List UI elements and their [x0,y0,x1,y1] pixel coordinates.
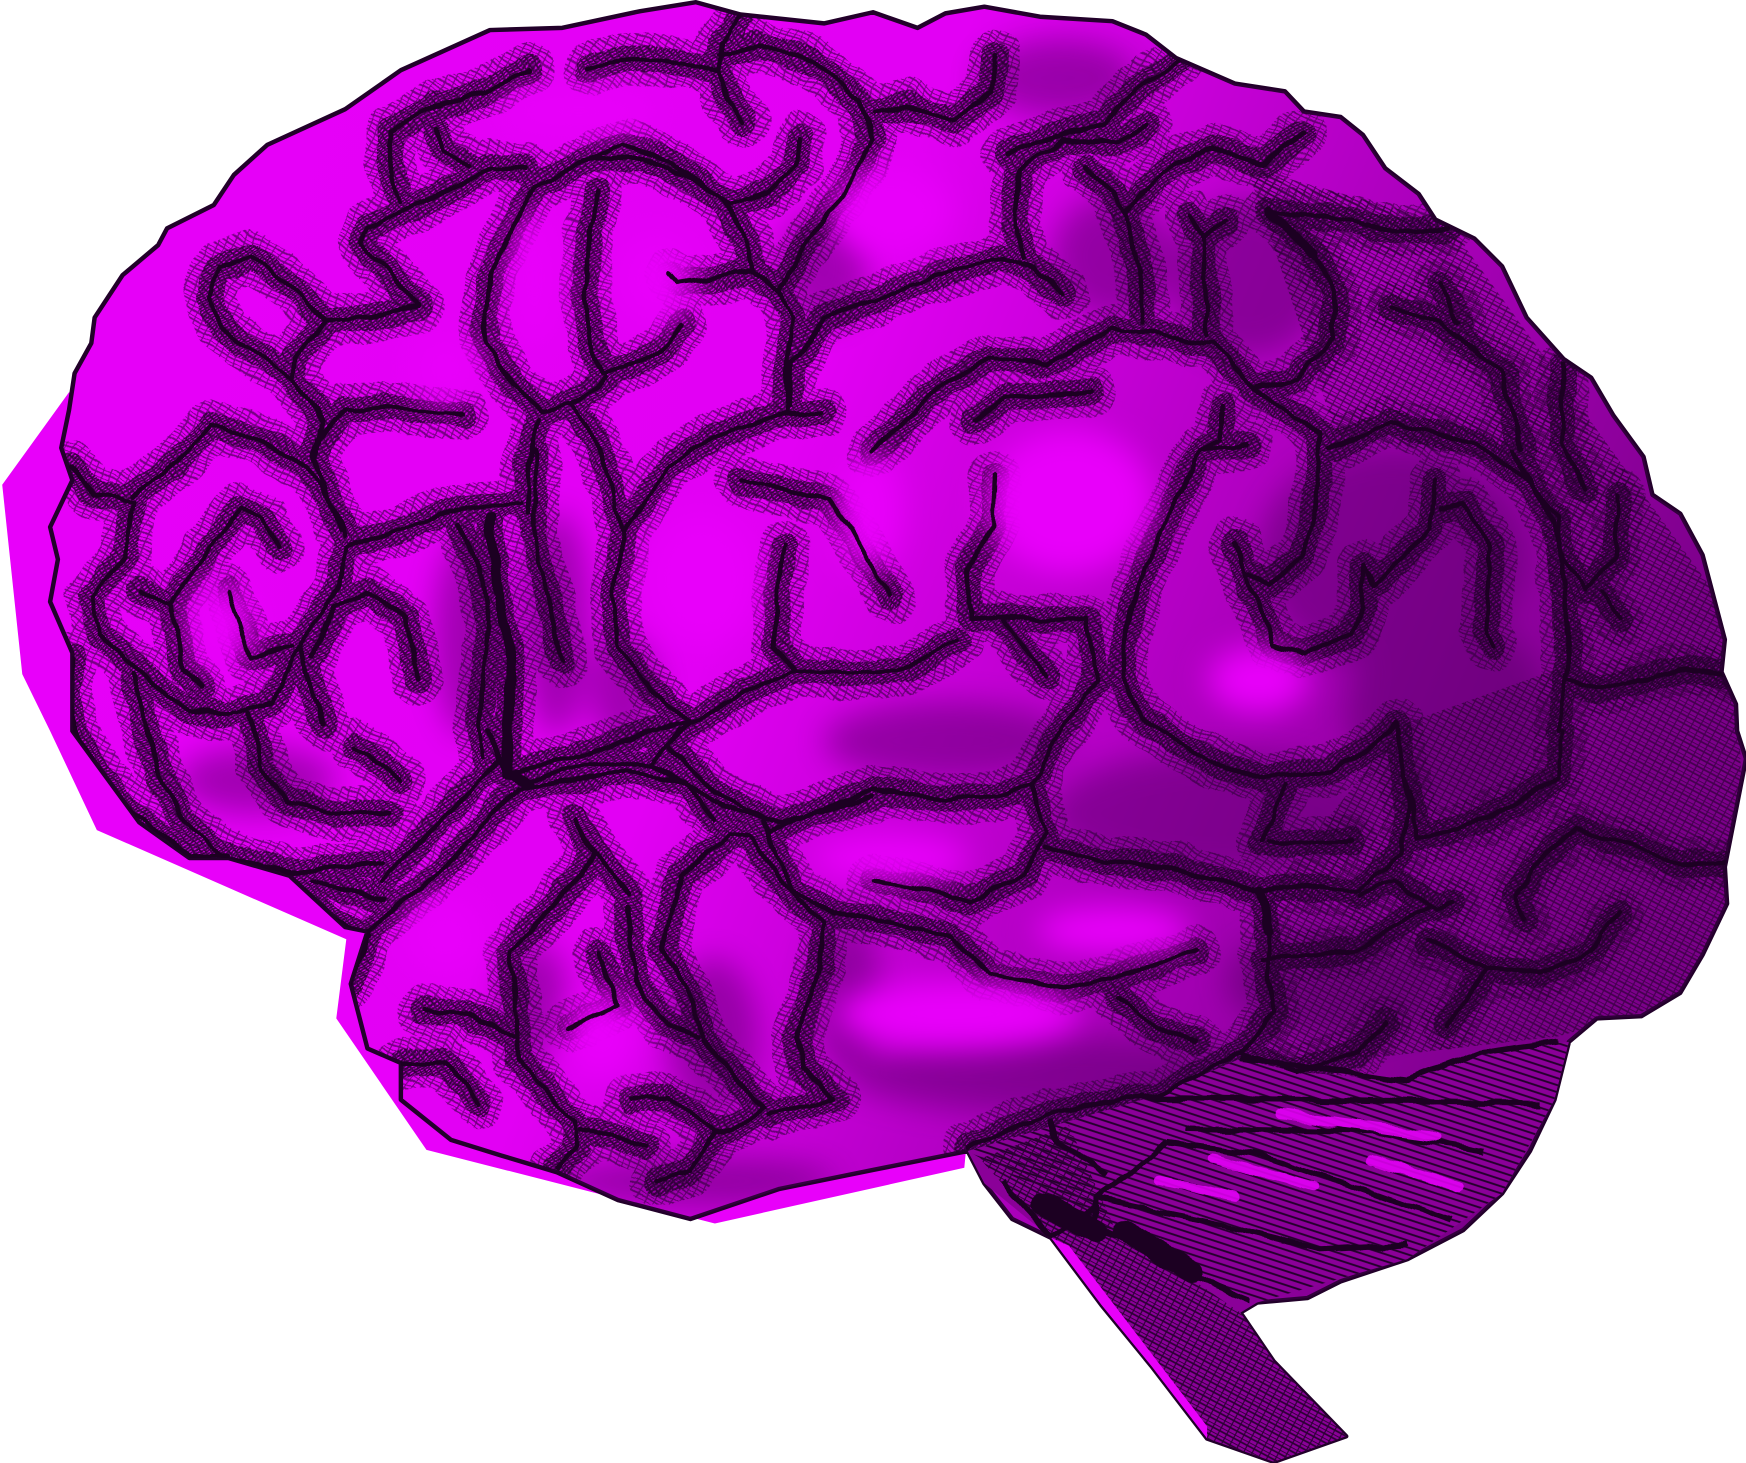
cerebellum and brain stem [968,1042,1569,1462]
soft mid-tone shadows [178,39,1548,1206]
gyrus highlights [189,91,1308,1081]
deep dark fissures [490,212,1313,932]
sulci outlines [67,17,1725,1181]
magenta offset backing shape [2,392,980,1223]
